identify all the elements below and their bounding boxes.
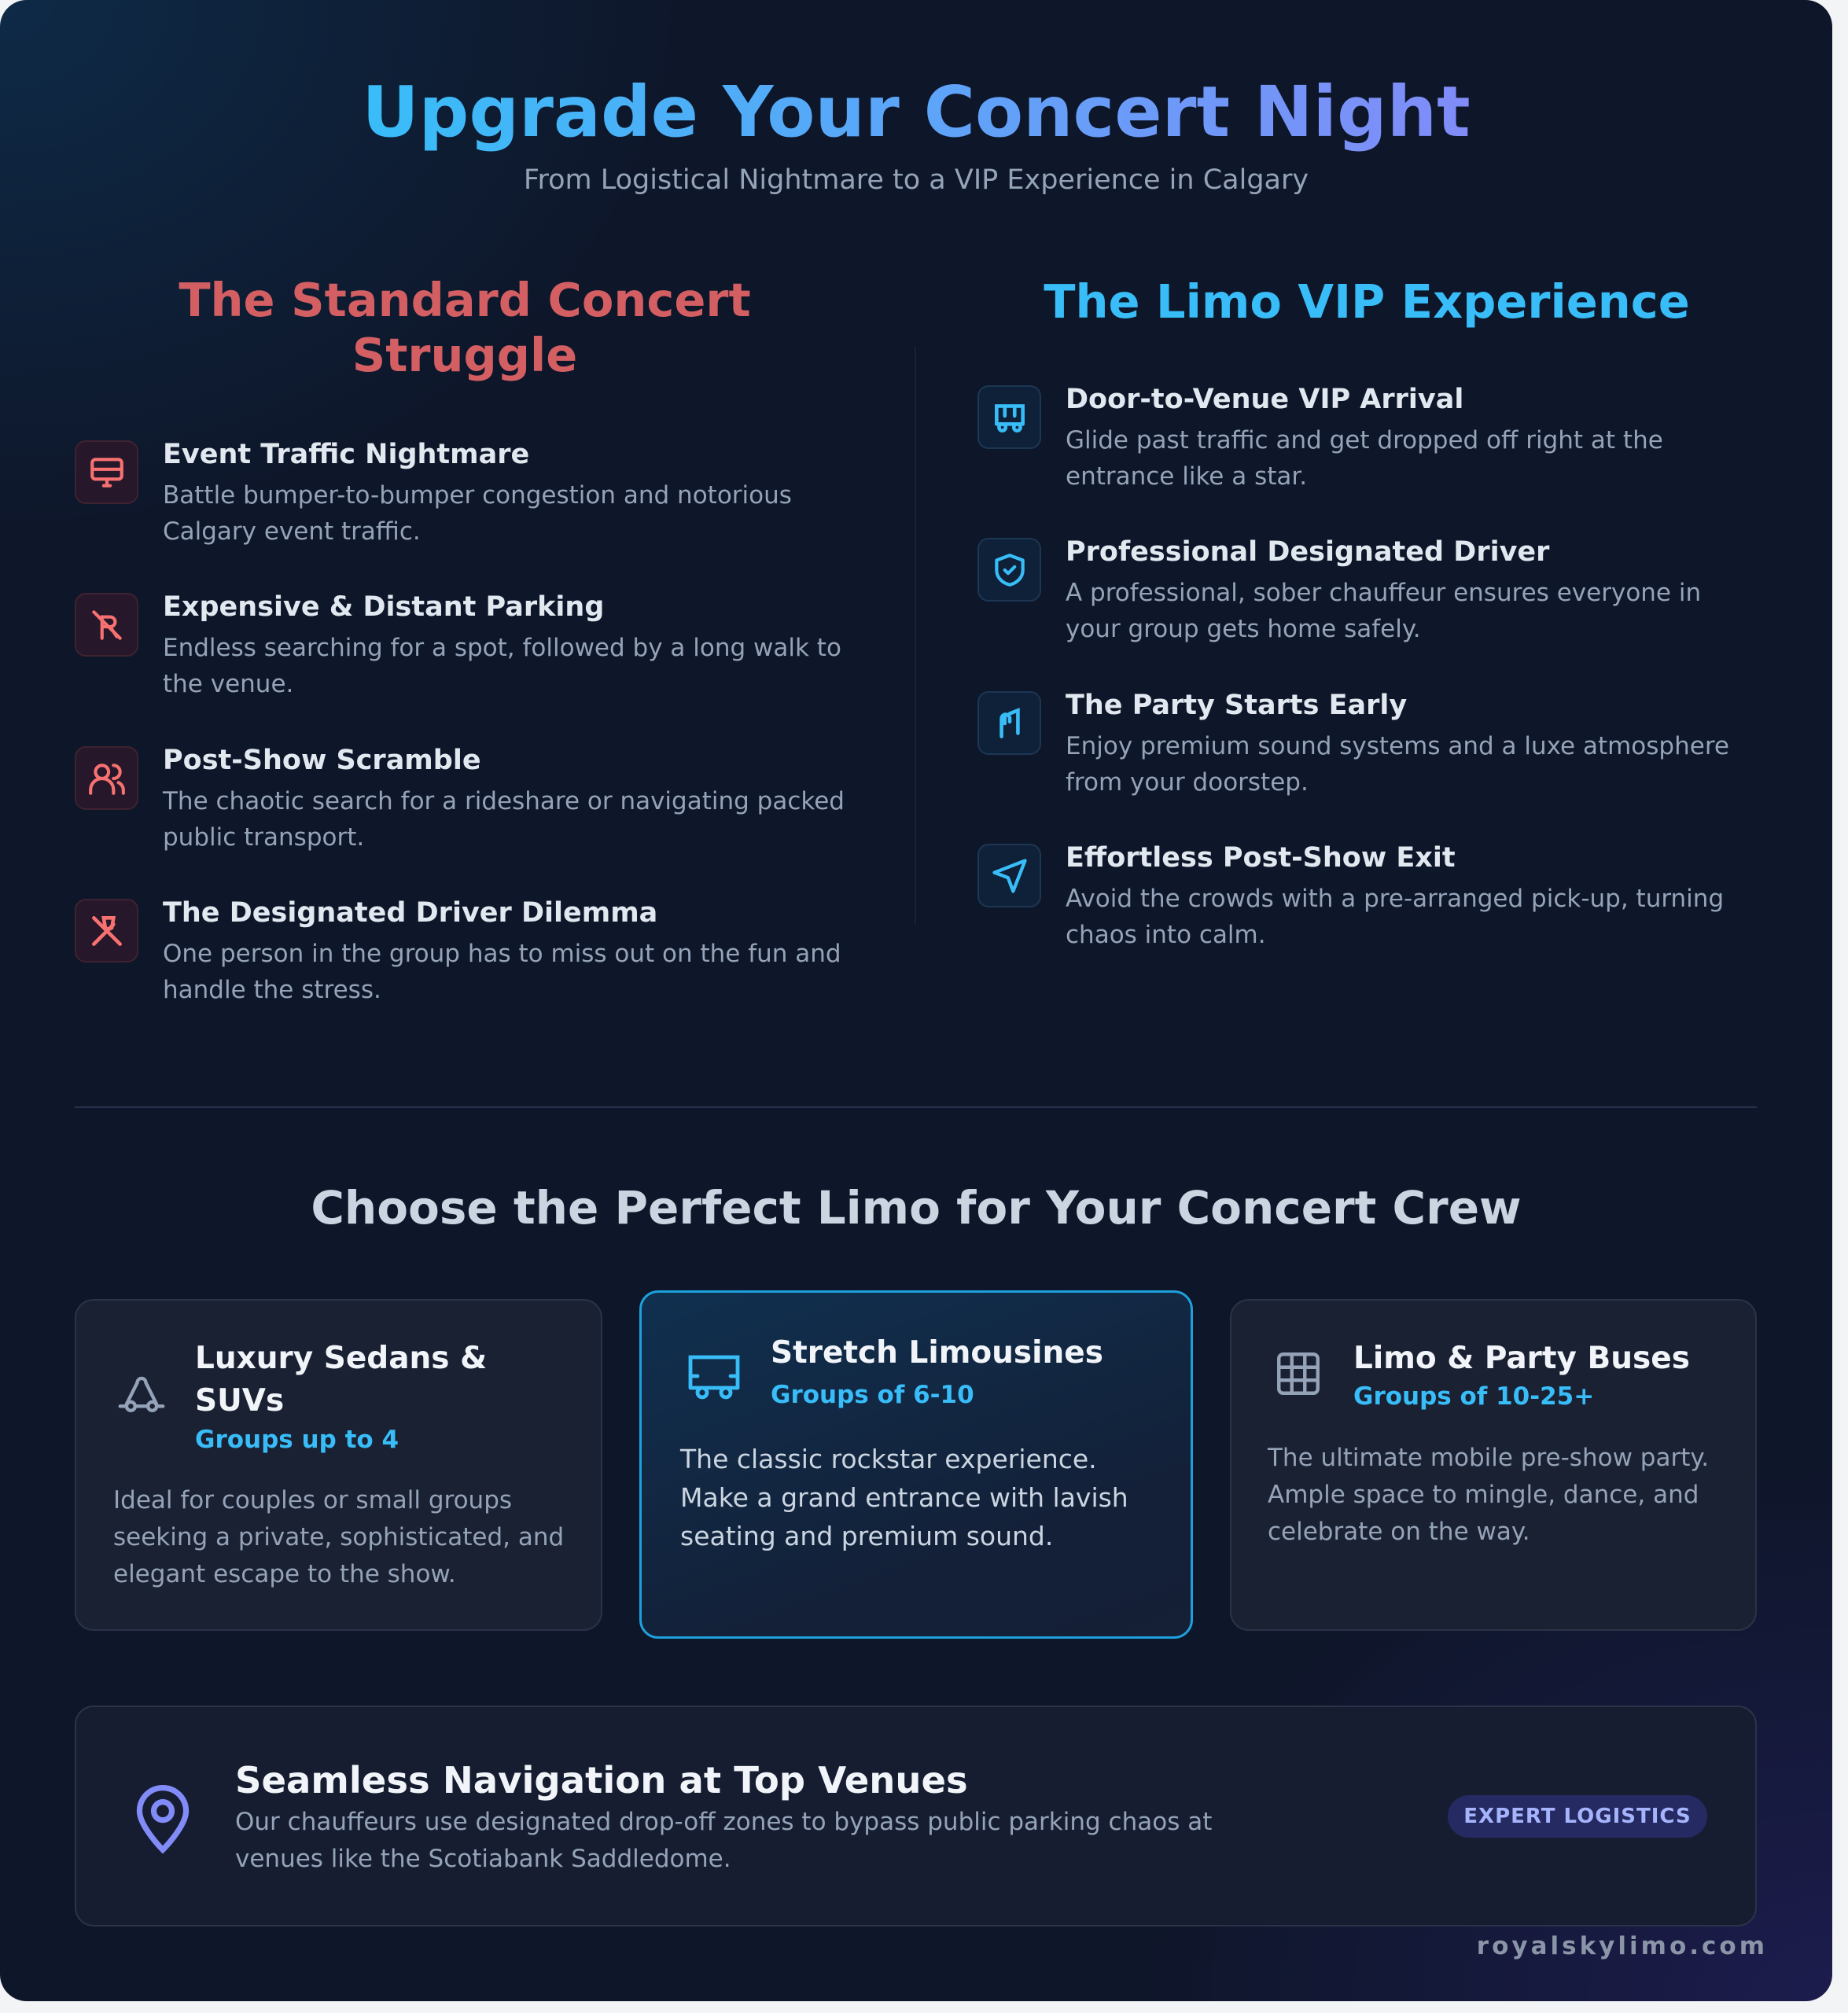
card: party buses: celebrate on the way. bbox=[1268, 1518, 1530, 1546]
item: scramble: public transport. bbox=[163, 823, 364, 852]
icon: limo bbox=[977, 385, 1041, 449]
icon: map pin bbox=[137, 1785, 189, 1854]
card: luxury sedans bbox=[75, 1299, 602, 1631]
card: luxury sedans: Luxury Sedans & bbox=[195, 1341, 487, 1376]
item: door to venue bbox=[977, 384, 1663, 491]
item: door to venue: entrance like a star. bbox=[1066, 462, 1307, 491]
badge: expert logistics: EXPERT LOGISTICS bbox=[1463, 1805, 1692, 1828]
heading: standard struggle bbox=[179, 273, 751, 382]
banner: seamless navigation bbox=[75, 1706, 1757, 1927]
card: luxury sedans: seeking a private, sophisticated, and bbox=[113, 1523, 564, 1551]
item: designated driver bbox=[75, 897, 841, 1004]
banner: seamless navigation: Seamless Navigation at Top Venues bbox=[235, 1759, 968, 1801]
card: party buses: The ultimate mobile pre-show party. bbox=[1268, 1444, 1709, 1472]
heading: limo vip: The Limo VIP Experience bbox=[1044, 274, 1690, 329]
card: luxury sedans: SUVs bbox=[195, 1383, 284, 1419]
banner: seamless navigation: venues like the Scotiabank Saddledome. bbox=[235, 1845, 731, 1873]
card: stretch limousines: The classic rockstar experience. bbox=[680, 1444, 1097, 1474]
card: stretch limousines bbox=[639, 1290, 1193, 1639]
item: parking: Expensive & Distant Parking bbox=[163, 591, 604, 623]
card: party buses: Limo & Party Buses bbox=[1353, 1341, 1690, 1376]
item: parking: the venue. bbox=[163, 670, 293, 698]
item: traffic bbox=[75, 439, 792, 546]
item: designated driver: The Designated Driver Dilemma bbox=[163, 897, 657, 929]
icon: shield bbox=[977, 538, 1041, 602]
badge: expert logistics bbox=[1448, 1795, 1707, 1838]
footer: website: royalskylimo.com bbox=[1477, 1932, 1768, 1960]
icon: traffic bbox=[75, 440, 138, 504]
icon: car bbox=[118, 1376, 165, 1412]
item: traffic: Calgary event traffic. bbox=[163, 517, 421, 546]
item: exit: chaos into calm. bbox=[1066, 921, 1266, 949]
item: driver: your group gets home safely. bbox=[1066, 615, 1421, 643]
icon: grid bus bbox=[1277, 1352, 1320, 1395]
heading: standard struggle: The Standard Concert bbox=[179, 273, 751, 327]
item: exit: Effortless Post-Show Exit bbox=[1066, 842, 1456, 874]
icon: people bbox=[75, 746, 138, 810]
item: door to venue: Glide past traffic and get dropped off right at the bbox=[1066, 426, 1663, 454]
item: parking bbox=[75, 591, 841, 698]
item: parking: Endless searching for a spot, followed by a long walk to bbox=[163, 634, 841, 662]
item: driver: A professional, sober chauffeur ensures everyone in bbox=[1066, 579, 1701, 607]
item: party: Enjoy premium sound systems and a luxe atmosphere bbox=[1066, 732, 1729, 760]
card: party buses: Groups of 10-25+ bbox=[1353, 1382, 1594, 1411]
panel: struggles bbox=[75, 439, 845, 1004]
item: exit bbox=[977, 842, 1724, 949]
heading: choose limo: Choose the Perfect Limo for Your Concert Crew bbox=[311, 1181, 1522, 1235]
item: exit: Avoid the crowds with a pre-arranged pick-up, turning bbox=[1066, 885, 1724, 913]
card: stretch limousines: seating and premium sound. bbox=[680, 1521, 1053, 1551]
item: party bbox=[977, 690, 1729, 797]
card: stretch limousines: Make a grand entrance with lavish bbox=[680, 1482, 1128, 1513]
icon: crossed glass bbox=[75, 899, 138, 962]
item: party: The Party Starts Early bbox=[1066, 690, 1407, 721]
item: driver bbox=[977, 536, 1701, 643]
item: traffic: Event Traffic Nightmare bbox=[163, 439, 529, 470]
card: luxury sedans: Ideal for couples or small groups bbox=[113, 1486, 512, 1514]
card: party buses bbox=[1230, 1299, 1757, 1631]
icon: glass bbox=[977, 691, 1041, 755]
item: scramble: The chaotic search for a rideshare or navigating packed bbox=[163, 787, 845, 815]
heading: standard struggle: Struggle bbox=[352, 328, 577, 382]
icon: limo bbox=[689, 1356, 739, 1400]
card: stretch limousines: Groups of 6-10 bbox=[771, 1381, 974, 1409]
item: door to venue: Door-to-Venue VIP Arrival bbox=[1066, 384, 1463, 415]
card: stretch limousines: Stretch Limousines bbox=[771, 1335, 1103, 1371]
card: luxury sedans: Groups up to 4 bbox=[195, 1426, 399, 1454]
item: traffic: Battle bumper-to-bumper congestion and notorious bbox=[163, 481, 792, 510]
icon: no parking bbox=[75, 593, 138, 657]
icon: navigation arrow bbox=[977, 844, 1041, 907]
panel: vip bbox=[977, 384, 1729, 949]
card: party buses: Ample space to mingle, dance, and bbox=[1268, 1481, 1699, 1509]
item: scramble: Post-Show Scramble bbox=[163, 745, 481, 776]
item: designated driver: One person in the group has to miss out on the fun and bbox=[163, 940, 841, 968]
banner: seamless navigation: Our chauffeurs use designated drop-off zones to bypass public parking chaos at bbox=[235, 1808, 1212, 1836]
subtitle: From Logistical Nightmare to a VIP Experience in Calgary bbox=[524, 164, 1309, 196]
item: party: from your doorstep. bbox=[1066, 768, 1309, 797]
card: luxury sedans: elegant escape to the show. bbox=[113, 1560, 456, 1588]
item: driver: Professional Designated Driver bbox=[1066, 536, 1549, 568]
item: designated driver: handle the stress. bbox=[163, 976, 381, 1004]
item: scramble bbox=[75, 745, 845, 852]
title: Upgrade Your Concert Night bbox=[362, 71, 1471, 153]
